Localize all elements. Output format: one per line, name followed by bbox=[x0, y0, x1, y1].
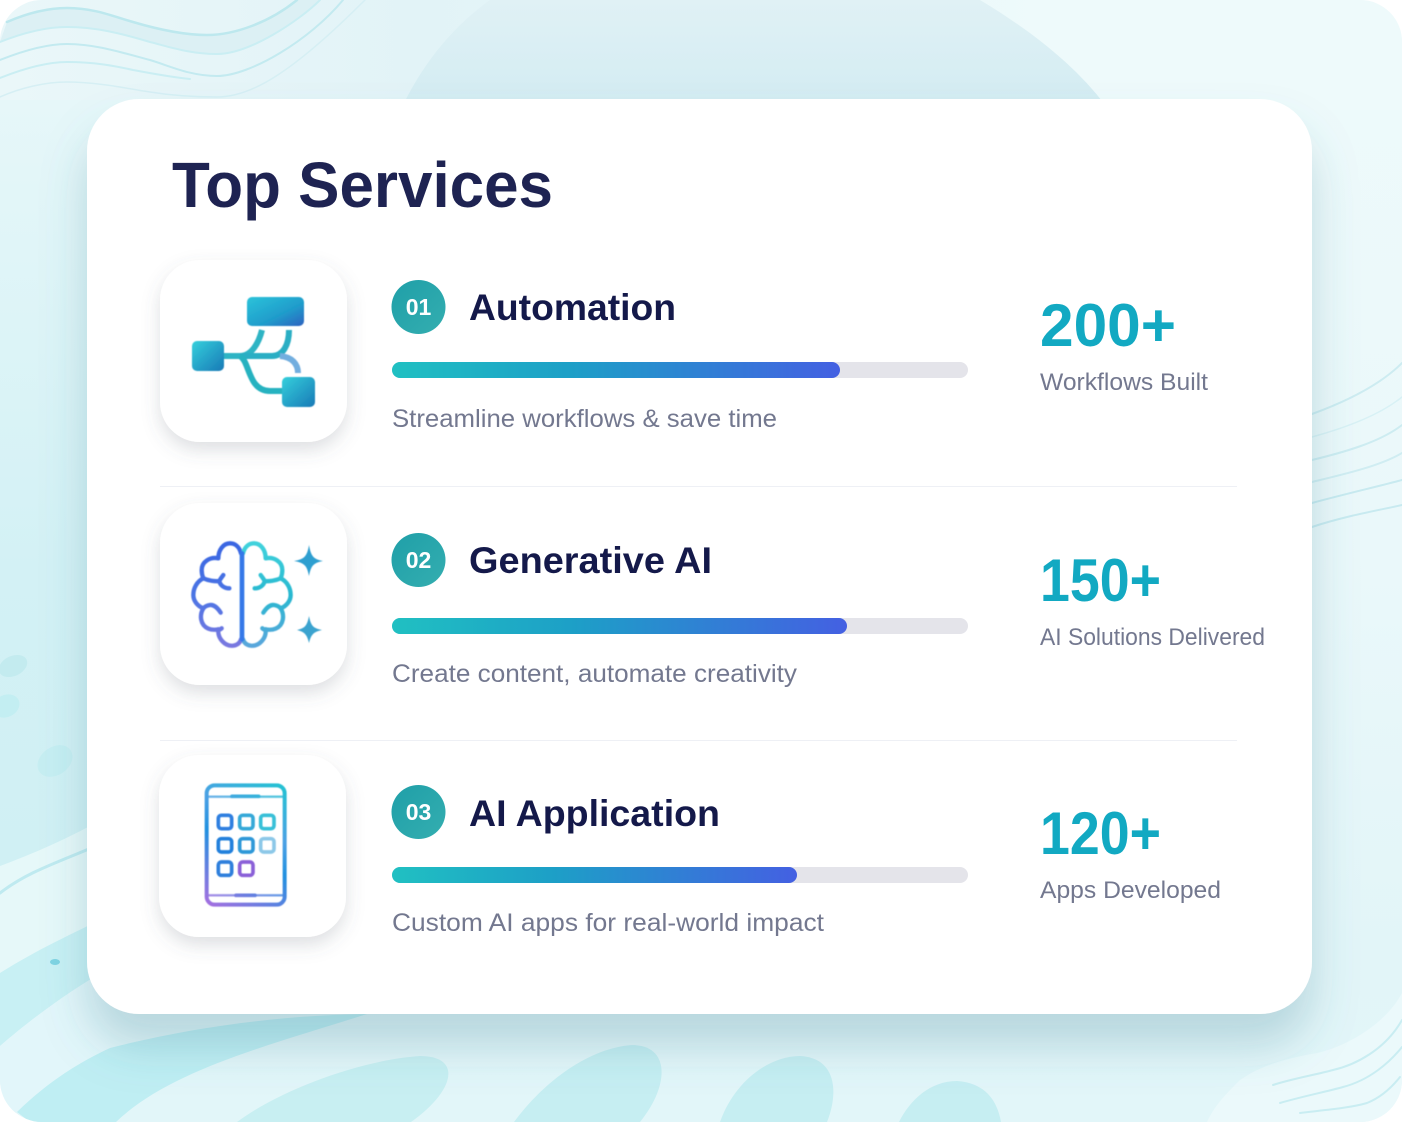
service name: Generative AI bbox=[469, 540, 712, 581]
icon: brain with sparkles bbox=[160, 503, 347, 685]
row: Automation bbox=[160, 260, 1208, 442]
progress bar bbox=[392, 618, 968, 634]
number badge 02 bbox=[392, 533, 446, 587]
stat label: Apps Developed bbox=[1040, 877, 1221, 904]
stat value: 120+ bbox=[1040, 800, 1161, 867]
progress bar bbox=[392, 867, 968, 883]
number badge 03 bbox=[392, 785, 446, 839]
number badge 01 bbox=[392, 280, 446, 334]
row: AI Application bbox=[159, 755, 1221, 937]
stat value: 150+ bbox=[1040, 547, 1161, 614]
description: Custom AI apps for real-world impact bbox=[392, 909, 824, 937]
service name: AI Application bbox=[469, 793, 720, 834]
number badge 03: 03 bbox=[406, 799, 431, 825]
number badge 02: 02 bbox=[406, 547, 431, 573]
description: Create content, automate creativity bbox=[392, 660, 798, 688]
heading: Top Services: Top Services bbox=[172, 149, 553, 221]
stat label: Workflows Built bbox=[1040, 369, 1208, 396]
panel: top services card bbox=[87, 99, 1312, 1014]
service name: Automation bbox=[469, 287, 676, 328]
icon: phone with app grid bbox=[159, 755, 346, 937]
row: Generative AI bbox=[160, 503, 1265, 688]
icon: workflow bbox=[160, 260, 347, 442]
description: Streamline workflows & save time bbox=[392, 405, 777, 433]
stat label: AI Solutions Delivered bbox=[1040, 624, 1265, 651]
stat value: 200+ bbox=[1040, 292, 1176, 359]
number badge 01: 01 bbox=[406, 294, 431, 320]
progress bar bbox=[392, 362, 968, 378]
